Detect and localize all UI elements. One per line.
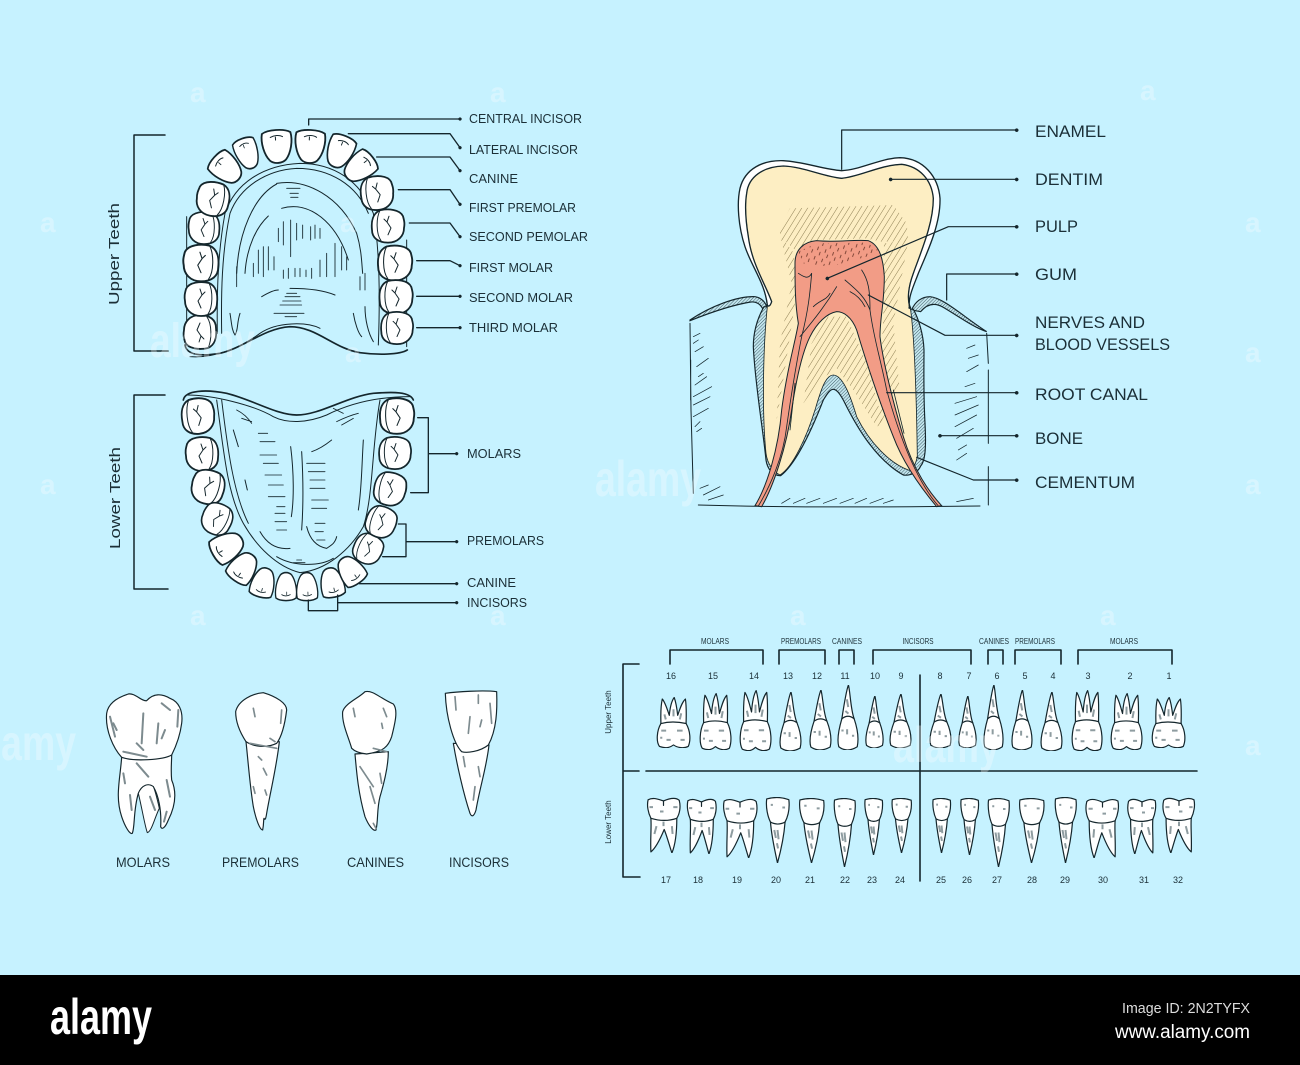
tooth type labels: [116, 854, 509, 870]
panel: lower teeth arch: [107, 391, 544, 611]
lower tooth numbers: 17: [661, 875, 671, 885]
lower tooth numbers: 22: [840, 875, 850, 885]
upper teeth row: [657, 685, 1185, 751]
upper tooth numbers: 8: [937, 671, 943, 681]
bone outline: [690, 323, 988, 507]
dentin: [746, 164, 933, 475]
watermarks: a: [40, 469, 56, 500]
lower tooth numbers: [661, 875, 1183, 885]
tooth: incisor: [445, 691, 497, 816]
upper teeth leader lines: [309, 117, 462, 329]
upper tooth numbers: 7: [966, 671, 972, 681]
upper tooth numbers: 4: [1050, 671, 1056, 681]
lower tooth numbers: 29: [1060, 875, 1070, 885]
watermarks: a: [1245, 730, 1261, 761]
upper teeth labels: SECOND PEMOLAR: [469, 229, 588, 244]
footer logo: alamy: [50, 989, 152, 1045]
upper teeth labels: CENTRAL INCISOR: [469, 111, 582, 126]
upper tooth numbers: 3: [1085, 671, 1091, 681]
upper teeth labels: FIRST MOLAR: [469, 260, 553, 275]
tooth section labels: NERVES AND: [1035, 313, 1145, 332]
upper teeth labels: THIRD MOLAR: [469, 320, 558, 335]
chart group labels: MOLARS: [1110, 637, 1138, 646]
tooth section labels: CEMENTUM: [1035, 473, 1135, 492]
tooth section labels: PULP: [1035, 217, 1078, 236]
tooth section labels: GUM: [1035, 265, 1077, 284]
lower teeth labels: CANINE: [467, 575, 516, 590]
tooth section labels: BLOOD VESSELS: [1035, 335, 1170, 354]
tooth type labels: MOLARS: [116, 854, 170, 870]
chart group labels: PREMOLARS: [1015, 637, 1055, 646]
upper tooth numbers: 15: [708, 671, 718, 681]
lower teeth labels: INCISORS: [467, 595, 527, 610]
lower teeth labels: [467, 446, 544, 610]
watermarks: alamy: [893, 717, 1000, 773]
enamel: [738, 158, 940, 308]
lower tooth numbers: 25: [936, 875, 946, 885]
lower tooth numbers: 27: [992, 875, 1002, 885]
footer url: www.alamy.com: [1114, 1022, 1250, 1043]
upper teeth labels: LATERAL INCISOR: [469, 142, 578, 157]
upper tooth numbers: 12: [812, 671, 822, 681]
chart side labels: Upper Teeth: [604, 690, 613, 734]
bone hatching: [693, 333, 978, 503]
chart group labels: PREMOLARS: [781, 637, 821, 646]
watermarks: a: [345, 337, 361, 368]
pulp: [755, 240, 942, 507]
lower tooth numbers: 21: [805, 875, 815, 885]
chart group labels: INCISORS: [902, 637, 934, 646]
upper teeth labels: FIRST PREMOLAR: [469, 200, 576, 215]
tooth section labels: DENTIM: [1035, 170, 1103, 189]
watermarks: a: [1100, 600, 1116, 631]
upper tooth numbers: 16: [666, 671, 676, 681]
lower tooth numbers: 32: [1173, 875, 1183, 885]
tooth type labels: PREMOLARS: [222, 854, 299, 870]
panel: numbered tooth chart: [604, 637, 1197, 885]
watermarks: a: [490, 600, 506, 631]
upper left teeth row: [183, 129, 293, 349]
upper tooth numbers: [666, 671, 1172, 681]
lower teeth labels: PREMOLARS: [467, 533, 544, 548]
pulp hatching: [798, 243, 878, 267]
watermarks: a: [1245, 337, 1261, 368]
lower tooth numbers: 18: [693, 875, 703, 885]
chart side labels: [604, 690, 613, 844]
lower tooth numbers: 31: [1139, 875, 1149, 885]
lower tooth numbers: 19: [732, 875, 742, 885]
watermarks: alamy: [595, 451, 701, 507]
panel: four tooth types: [106, 691, 509, 870]
lower tooth numbers: 20: [771, 875, 781, 885]
leader lines: [827, 130, 1017, 480]
watermarks: a: [1245, 207, 1261, 238]
panel: tooth cross-section: [690, 122, 1170, 507]
upper tooth numbers: 5: [1022, 671, 1028, 681]
tooth section labels: ENAMEL: [1035, 122, 1106, 141]
nerves and vessels: [758, 270, 938, 506]
upper tooth numbers: 11: [840, 671, 850, 681]
bracket: lower teeth: [134, 395, 168, 589]
tooth section labels: BONE: [1035, 429, 1083, 448]
watermarks: a: [190, 600, 206, 631]
tooth type labels: INCISORS: [449, 854, 509, 870]
tooth: canine: [343, 691, 396, 830]
bracket: upper teeth: [134, 135, 168, 351]
upper tooth numbers: 14: [749, 671, 759, 681]
chart group labels: CANINES: [979, 637, 1009, 646]
upper right teeth row: [294, 129, 413, 344]
upper tooth numbers: 13: [783, 671, 793, 681]
heading: Upper Teeth: Upper Teeth: [106, 203, 123, 305]
lower teeth row: [180, 397, 414, 601]
lower tooth numbers: 23: [867, 875, 877, 885]
chart group labels: MOLARS: [701, 637, 729, 646]
lower teeth row: [648, 798, 1194, 867]
chart group labels: [701, 637, 1138, 646]
tooth type labels: CANINES: [347, 854, 404, 870]
tooth section labels: ROOT CANAL: [1035, 385, 1148, 404]
tooth: molar: [106, 694, 182, 834]
lower tooth numbers: 30: [1098, 875, 1108, 885]
upper tooth numbers: 6: [994, 671, 1000, 681]
chart group labels: CANINES: [832, 637, 862, 646]
upper teeth labels: [469, 111, 588, 335]
lower tooth numbers: 24: [895, 875, 905, 885]
dentin hatching: [780, 205, 908, 250]
tooth section drawing: [690, 128, 1019, 507]
upper tooth numbers: 9: [898, 671, 904, 681]
chart side labels: Lower Teeth: [604, 800, 613, 844]
watermarks: a: [1245, 469, 1261, 500]
watermarks: a: [190, 77, 206, 108]
chart axes and brackets: [623, 650, 1197, 881]
upper teeth labels: CANINE: [469, 171, 518, 186]
watermarks: a: [1140, 75, 1156, 106]
upper tooth numbers: 10: [870, 671, 880, 681]
upper teeth labels: SECOND MOLAR: [469, 290, 573, 305]
upper palate drawing: [185, 163, 407, 357]
lower palate drawing: [183, 391, 413, 573]
panel: upper teeth arch: [106, 111, 588, 357]
periodontal ligament band: [753, 307, 926, 476]
heading: Lower Teeth: Lower Teeth: [107, 447, 124, 549]
watermarks: a: [490, 77, 506, 108]
footer bar: [0, 975, 1300, 1065]
footer image id: Image ID: 2N2TYFX: [1122, 1000, 1250, 1017]
upper tooth numbers: 1: [1166, 671, 1172, 681]
watermarks: [0, 75, 1261, 773]
lower teeth leader lines: [308, 418, 458, 611]
lower tooth numbers: 26: [962, 875, 972, 885]
watermarks: alamy: [150, 315, 255, 368]
lower tooth numbers: 28: [1027, 875, 1037, 885]
watermarks: a: [40, 207, 56, 238]
upper tooth numbers: 2: [1127, 671, 1133, 681]
tooth section labels: [1035, 122, 1170, 492]
watermarks: a: [340, 207, 356, 238]
left gum: [690, 297, 767, 321]
lower teeth labels: MOLARS: [467, 446, 521, 461]
watermarks: a: [790, 600, 806, 631]
right gum: [912, 297, 987, 332]
tooth: premolar: [236, 693, 287, 830]
